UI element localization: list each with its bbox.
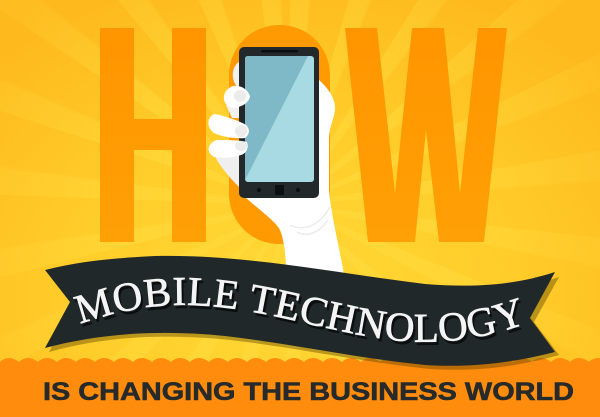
palm shade [212, 150, 239, 187]
screen reflection [245, 56, 308, 180]
hand and wrist [239, 80, 345, 280]
big letter W [345, 28, 507, 242]
finger one [224, 86, 250, 108]
finger two [208, 114, 249, 138]
orange footer band with scalloped edge [0, 358, 600, 417]
subtitle: IS CHANGING THE BUSINESS WORLD [43, 378, 574, 406]
segment between fingers [226, 105, 239, 118]
big letter O [229, 25, 330, 244]
ribbon banner [45, 256, 559, 370]
speaker [261, 50, 298, 52]
finger two nail [235, 125, 247, 137]
thumb base [233, 62, 239, 88]
wrist creases [290, 207, 330, 234]
sunburst background rays [54, 0, 526, 285]
finger three [209, 140, 248, 158]
ribbon title: MOBILE TECHNOLOGY [72, 278, 522, 346]
icon: smartphone [239, 47, 319, 198]
phone screen [245, 56, 314, 182]
home buttons [257, 185, 300, 195]
big letter H [100, 28, 206, 242]
ribbon shadow [49, 260, 559, 370]
icon: fingers gripping phone [208, 62, 250, 187]
finger one nail [234, 90, 246, 102]
ribbon body [45, 256, 555, 366]
phone body [239, 47, 319, 198]
finger three nail [235, 141, 247, 151]
